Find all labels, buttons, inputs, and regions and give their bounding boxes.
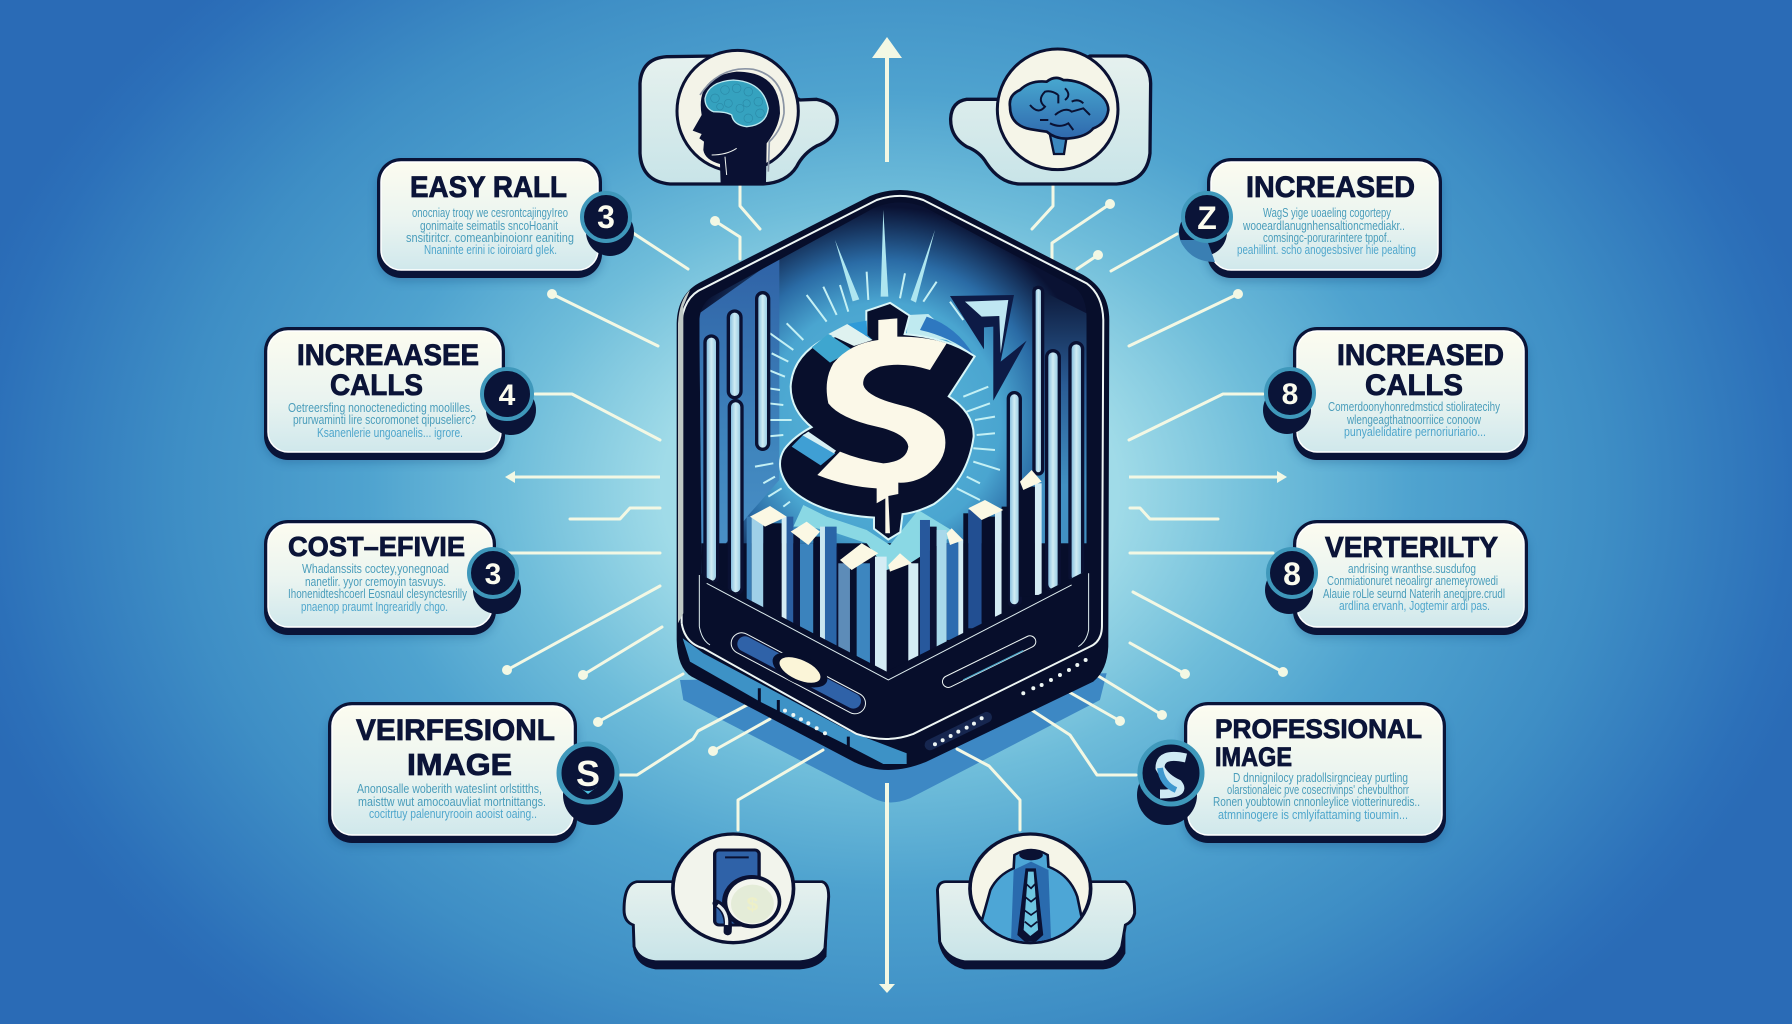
icon circle bbox=[673, 834, 794, 943]
body text bbox=[1323, 562, 1505, 613]
body text: Conmiationuret neoalirgr anemeyrowedi bbox=[1327, 574, 1498, 588]
arrow: down bbox=[879, 783, 895, 993]
body text: andrising wranthse.susdufog bbox=[1348, 562, 1476, 576]
screen bottom rule bbox=[707, 583, 1072, 680]
heading: EASY RALL bbox=[410, 171, 567, 204]
body text: Anonosalle woberith watesIint orlstitths, bbox=[357, 782, 542, 796]
heading: COST–EFIVIE bbox=[288, 531, 465, 562]
card: increased bbox=[1179, 158, 1442, 281]
heading: VERTERILTY bbox=[1325, 532, 1498, 564]
body text: ardlina ervanh, Jogtemir ardi pas. bbox=[1339, 599, 1490, 613]
number badge: 8 bbox=[1283, 556, 1301, 592]
dollar cream S bbox=[817, 318, 947, 533]
body text: Whadanssits coctey,yonegnoad bbox=[302, 562, 449, 576]
body text: comsingc-porurarintere tppof.. bbox=[1263, 231, 1392, 245]
arrow: up bbox=[872, 37, 902, 162]
icon circle bbox=[970, 834, 1091, 943]
top-right arc behind dollar bbox=[907, 314, 975, 357]
heading bbox=[1215, 714, 1422, 772]
card: verterilty bbox=[1265, 520, 1528, 637]
pod shape bbox=[624, 882, 829, 962]
heading: INCREASED bbox=[1246, 171, 1415, 204]
body text: gonimaite seimatils sncoHoanit bbox=[420, 219, 558, 233]
number badge bbox=[582, 193, 634, 256]
card shape bbox=[1293, 520, 1528, 637]
front 3D bars bbox=[747, 483, 1042, 673]
card shape bbox=[1184, 702, 1446, 846]
card: increased calls bbox=[1263, 327, 1528, 462]
top-right pod: brain bbox=[951, 49, 1151, 184]
phone side seams bbox=[759, 688, 848, 753]
number badge bbox=[482, 369, 536, 435]
body text: Ronen youbtowin cnnonleylice viotterinuredis.. bbox=[1213, 795, 1420, 809]
body text: peahillint. scho anogesbsiver hie pealting bbox=[1237, 243, 1416, 257]
body text: wooeardlanugnhensaltioncmediakr.. bbox=[1242, 219, 1405, 233]
burst rays bbox=[755, 272, 1000, 507]
dollar sign bbox=[781, 304, 975, 538]
heading bbox=[1337, 339, 1504, 402]
handset speaker mark bbox=[725, 854, 749, 860]
body text: nanetlir. yyor cremoyin tasvuys. bbox=[305, 575, 446, 589]
body text: cocitrtuy palenuryrooin aooist oaing.. bbox=[369, 807, 537, 821]
body text bbox=[288, 401, 476, 440]
card: cost-efivie bbox=[264, 520, 521, 637]
icon circle bbox=[997, 49, 1118, 170]
dollar badge bbox=[559, 744, 623, 825]
body text: Ksanenlerie ungoanelis... igrore. bbox=[317, 426, 463, 440]
number badge: 8 bbox=[1282, 378, 1298, 411]
card: easy rall bbox=[377, 158, 634, 281]
heading: INCREASED bbox=[1337, 339, 1504, 372]
dollar dark outline bbox=[781, 304, 973, 538]
arrow: right horizontal bbox=[1129, 471, 1287, 483]
central phone bbox=[677, 190, 1109, 770]
heading: PROFESSIONAL bbox=[1215, 714, 1422, 744]
pod base bbox=[939, 927, 1125, 969]
body text: WagS yige uoaeling cogortepy bbox=[1263, 206, 1392, 220]
jaw lines bbox=[712, 148, 737, 175]
pod shape bbox=[951, 56, 1151, 184]
body text bbox=[1328, 400, 1501, 439]
phone grille bbox=[783, 658, 1088, 746]
body text bbox=[288, 562, 468, 614]
body text: D dnnignilocy pradollsirgncieay purtling bbox=[1233, 771, 1408, 785]
shirt bbox=[982, 848, 1082, 942]
body text bbox=[1213, 771, 1420, 822]
body text: onocniay troqy we cesrontcajingyIreo bbox=[412, 206, 568, 220]
body text: Ihonenidteshcoerl Eosnaul clesynctesrilly bbox=[288, 587, 468, 601]
body text: Oetreersfing nonoctenedicting moolilles. bbox=[288, 401, 473, 415]
number badge: Z bbox=[1197, 200, 1217, 236]
body text: snsitiritcr. comeanbinoionr eaniting bbox=[406, 231, 574, 245]
heading: INCREAASEE bbox=[297, 339, 479, 372]
brain bbox=[705, 80, 768, 127]
inner thin bezel line bbox=[699, 573, 1089, 647]
handset bbox=[715, 850, 759, 925]
body text: punyalelidatire pernoriuriario... bbox=[1344, 425, 1486, 439]
heading: VEIRFESIONL bbox=[356, 714, 555, 747]
body text bbox=[357, 782, 546, 821]
card: increase calls bbox=[264, 327, 536, 462]
card: professional image bbox=[1137, 702, 1446, 846]
brain icon bbox=[1010, 78, 1108, 154]
heading bbox=[297, 339, 479, 402]
trend arrow glyph bbox=[950, 295, 1027, 401]
pod shape bbox=[640, 56, 837, 184]
phone ground shadow bbox=[680, 673, 1107, 802]
body text: atmninogere is cmlyifattaming tioumin... bbox=[1218, 808, 1408, 822]
heading: CALLS bbox=[1365, 369, 1463, 402]
card shape bbox=[1293, 327, 1528, 462]
number badge: 4 bbox=[499, 379, 516, 412]
pod base bbox=[633, 897, 829, 969]
body text bbox=[406, 206, 574, 257]
top-left pod: head with brain bbox=[640, 50, 837, 184]
rear bars bbox=[705, 287, 1083, 606]
body text: Alauie roLle seurnd Naterih aneqjpre.crudl bbox=[1323, 587, 1505, 601]
body text: wlengeagthatnoorriice conoow bbox=[1346, 413, 1482, 427]
head highlight bbox=[700, 69, 784, 172]
phone left edge sheen bbox=[678, 290, 690, 623]
body text: pnaenop praumt Ingrearidly chgo. bbox=[301, 600, 448, 614]
card shape bbox=[1207, 158, 1442, 281]
bottom-left pod: phone and headset bbox=[624, 834, 829, 969]
body text: Comerdoonyhonredmsticd stioliratecihy bbox=[1328, 400, 1501, 414]
body text: prurwaminti lire scoromonet qipuselierc? bbox=[293, 413, 476, 427]
phone screen bbox=[697, 193, 1090, 677]
body text: maisttw wut amocoauvliat mortnittangs. bbox=[358, 795, 546, 809]
infographic canvas bbox=[261, 37, 1531, 993]
card shape bbox=[264, 520, 496, 637]
number badge bbox=[1263, 369, 1314, 434]
card: veirfesional image bbox=[328, 702, 623, 846]
burst spikes bbox=[835, 210, 935, 303]
number badge bbox=[1179, 193, 1231, 262]
dollar badge bbox=[1137, 742, 1202, 825]
body text: olarstionaleic pve cosecrivinps' chevbulthorr bbox=[1227, 783, 1409, 797]
pod shape bbox=[937, 882, 1135, 962]
dollar blue stripes bbox=[792, 321, 873, 465]
phone home button pill bbox=[742, 643, 855, 703]
phone body bbox=[677, 190, 1109, 770]
number badge: 3 bbox=[597, 199, 615, 235]
phone side band bbox=[683, 638, 907, 764]
icon circle bbox=[677, 50, 798, 172]
card shape bbox=[377, 158, 602, 281]
number badge bbox=[469, 549, 521, 614]
heading: CALLS bbox=[330, 369, 423, 402]
heading: IMAGE bbox=[1215, 742, 1292, 772]
body text bbox=[1237, 206, 1416, 257]
head silhouette bbox=[693, 72, 780, 184]
bar tops bbox=[750, 470, 1042, 572]
heading: IMAGE bbox=[407, 747, 512, 782]
phone bezel highlight bbox=[681, 196, 1103, 739]
headset coin bbox=[717, 875, 781, 932]
headset coin: $ bbox=[747, 895, 758, 915]
phone speaker slot bbox=[948, 642, 1030, 682]
connector lines bbox=[504, 180, 1286, 830]
dollar badge: S bbox=[576, 753, 600, 794]
heading bbox=[356, 714, 555, 782]
number badge: 3 bbox=[485, 558, 501, 591]
number badge bbox=[1265, 549, 1316, 614]
body text: Nnaninte erini ic ioiroiard gIek. bbox=[424, 243, 557, 257]
bottom-right pod: shirt and tie bbox=[937, 834, 1135, 969]
card shape bbox=[328, 702, 577, 846]
arrow: left horizontal bbox=[505, 471, 660, 483]
card shape bbox=[264, 327, 505, 462]
teal shards bbox=[793, 505, 957, 570]
